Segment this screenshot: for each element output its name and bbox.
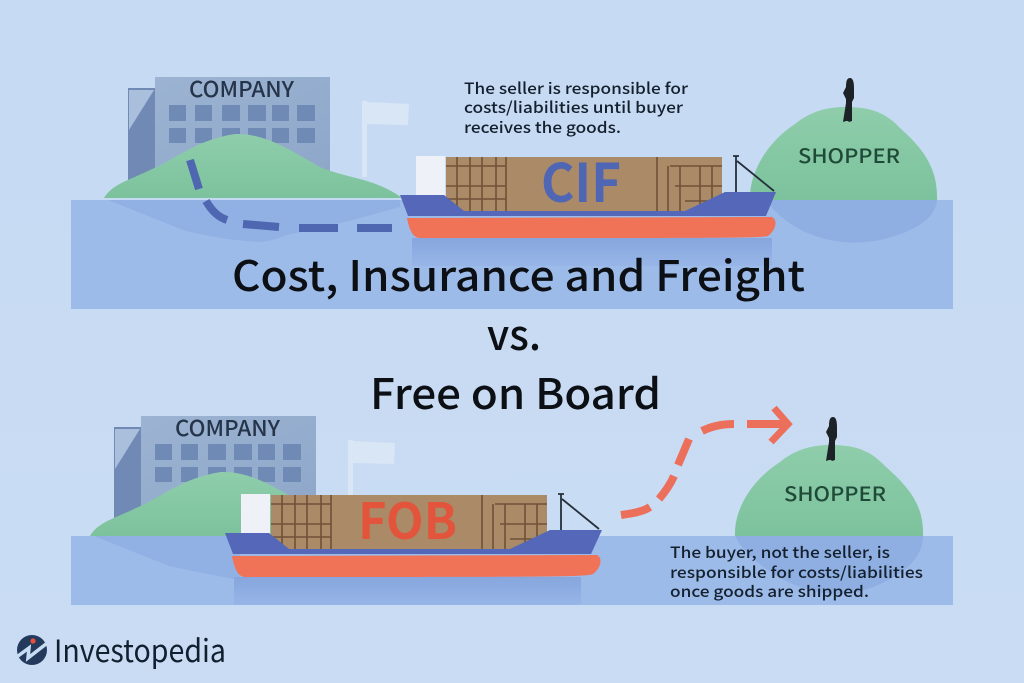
hill reflection: CIF xyxy=(108,200,400,242)
title xyxy=(232,243,805,422)
person: CIF xyxy=(843,78,854,122)
ship hull bottom: FOB xyxy=(232,555,600,577)
label: COMPANY: COMPANY xyxy=(175,411,281,443)
mast: CIF xyxy=(733,156,774,192)
company building: CIF xyxy=(128,72,330,180)
text: seller responsibility: receives the goods. xyxy=(464,116,621,138)
ship reflection: CIF xyxy=(412,238,772,266)
text: buyer responsibility: responsible for costs/liabilities xyxy=(670,561,923,583)
hill: company CIF xyxy=(104,134,402,198)
hill reflection: shopper FOB xyxy=(735,536,923,594)
panel: CIF scene xyxy=(71,72,953,309)
water: FOB xyxy=(71,536,953,605)
dashed route: CIF xyxy=(190,160,392,228)
label: FOB: FOB xyxy=(358,482,457,554)
title: vs. xyxy=(487,302,541,363)
flag: FOB xyxy=(348,440,395,516)
text: buyer responsibility: The buyer, not the seller, is xyxy=(670,541,890,563)
ship: FOB xyxy=(225,482,602,577)
logo: Investopedia xyxy=(17,626,226,671)
label: COMPANY: COMPANY xyxy=(189,72,295,104)
flag: CIF xyxy=(362,101,409,177)
label: CIF: CIF xyxy=(541,142,621,218)
dashed arrow: FOB xyxy=(621,408,788,515)
hill: company FOB xyxy=(90,472,388,536)
title: Free on Board xyxy=(370,361,661,422)
text: buyer responsibility: once goods are shipped. xyxy=(670,580,869,602)
icon: logo mark xyxy=(17,635,47,665)
text: seller responsibility: The seller is responsible for xyxy=(464,77,689,99)
hill reflection: FOB xyxy=(94,536,240,580)
hill: shopper CIF xyxy=(750,107,937,200)
label: SHOPPER CIF: SHOPPER xyxy=(798,140,900,169)
hill reflection: shopper CIF xyxy=(765,200,937,243)
title: Cost, Insurance and Freight xyxy=(232,243,805,304)
company building: FOB xyxy=(114,411,316,519)
ship hull bottom: CIF xyxy=(407,217,775,238)
label: SHOPPER FOB: SHOPPER xyxy=(784,478,886,507)
wordmark: Investopedia xyxy=(54,626,226,671)
person: FOB xyxy=(826,417,837,461)
panel: FOB scene xyxy=(71,408,953,605)
ship: CIF xyxy=(400,142,776,238)
water: CIF xyxy=(71,200,953,309)
mast: FOB xyxy=(558,494,599,530)
ship hull top: FOB xyxy=(225,530,602,554)
text: seller responsibility: costs/liabilities until buyer xyxy=(464,96,684,118)
ship reflection: FOB xyxy=(234,577,581,605)
ship hull top: CIF xyxy=(400,192,776,216)
hill: shopper FOB xyxy=(735,445,923,536)
